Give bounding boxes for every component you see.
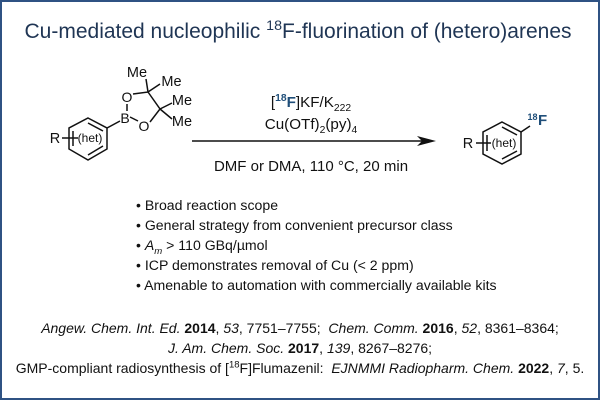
reaction arrow bbox=[192, 136, 436, 146]
reactant: aryl pinacol boronate: O bbox=[122, 89, 133, 105]
reactant: aryl pinacol boronate: O bbox=[139, 118, 150, 134]
reactant: aryl pinacol boronate: (het) bbox=[78, 131, 102, 145]
references bbox=[16, 320, 584, 376]
reagents above arrow: [18F]KF/K222 bbox=[271, 93, 351, 114]
reactant: aryl pinacol boronate: B bbox=[120, 110, 130, 126]
reactant: aryl pinacol boronate: Me bbox=[172, 93, 192, 109]
references: GMP-compliant radiosynthesis of [18F]Flumazenil: EJNMMI Radiopharm. Chem. 2022, 7, 5. bbox=[16, 359, 584, 376]
bullet list: • Amenable to automation with commercially available kits bbox=[136, 277, 497, 293]
bullet list: • Am > 110 GBq/µmol bbox=[136, 237, 268, 257]
conditions below arrow: DMF or DMA, 110 °C, 20 min bbox=[214, 158, 408, 175]
reactant: aryl pinacol boronate: Me bbox=[161, 74, 182, 90]
reactant: aryl pinacol boronate bbox=[50, 65, 192, 160]
product: aryl fluoride-18: R bbox=[463, 136, 473, 152]
product: aryl fluoride-18: 18 bbox=[528, 112, 538, 122]
reagents above arrow: Cu(OTf)2(py)4 bbox=[265, 116, 357, 136]
bullet list: • Broad reaction scope bbox=[136, 197, 278, 213]
title: Cu-mediated nucleophilic 18F-fluorination of (hetero)arenes bbox=[24, 18, 572, 43]
bullet list: • General strategy from convenient precursor class bbox=[136, 217, 453, 233]
product: aryl fluoride-18: F bbox=[538, 112, 547, 129]
references: Angew. Chem. Int. Ed. 2014, 53, 7751–7755; Chem. Comm. 2016, 52, 8361–8364; bbox=[41, 320, 559, 336]
bullet list bbox=[136, 197, 497, 293]
product: aryl fluoride-18: (het) bbox=[492, 136, 516, 150]
product: aryl fluoride-18 bbox=[463, 112, 547, 164]
reagents above arrow bbox=[265, 93, 357, 136]
reactant: aryl pinacol boronate: Me bbox=[127, 65, 147, 81]
references: J. Am. Chem. Soc. 2017, 139, 8267–8276; bbox=[168, 340, 432, 356]
reactant: aryl pinacol boronate: R bbox=[50, 131, 60, 147]
bullet list: • ICP demonstrates removal of Cu (< 2 ppm) bbox=[136, 257, 414, 273]
reactant: aryl pinacol boronate: Me bbox=[172, 114, 192, 130]
